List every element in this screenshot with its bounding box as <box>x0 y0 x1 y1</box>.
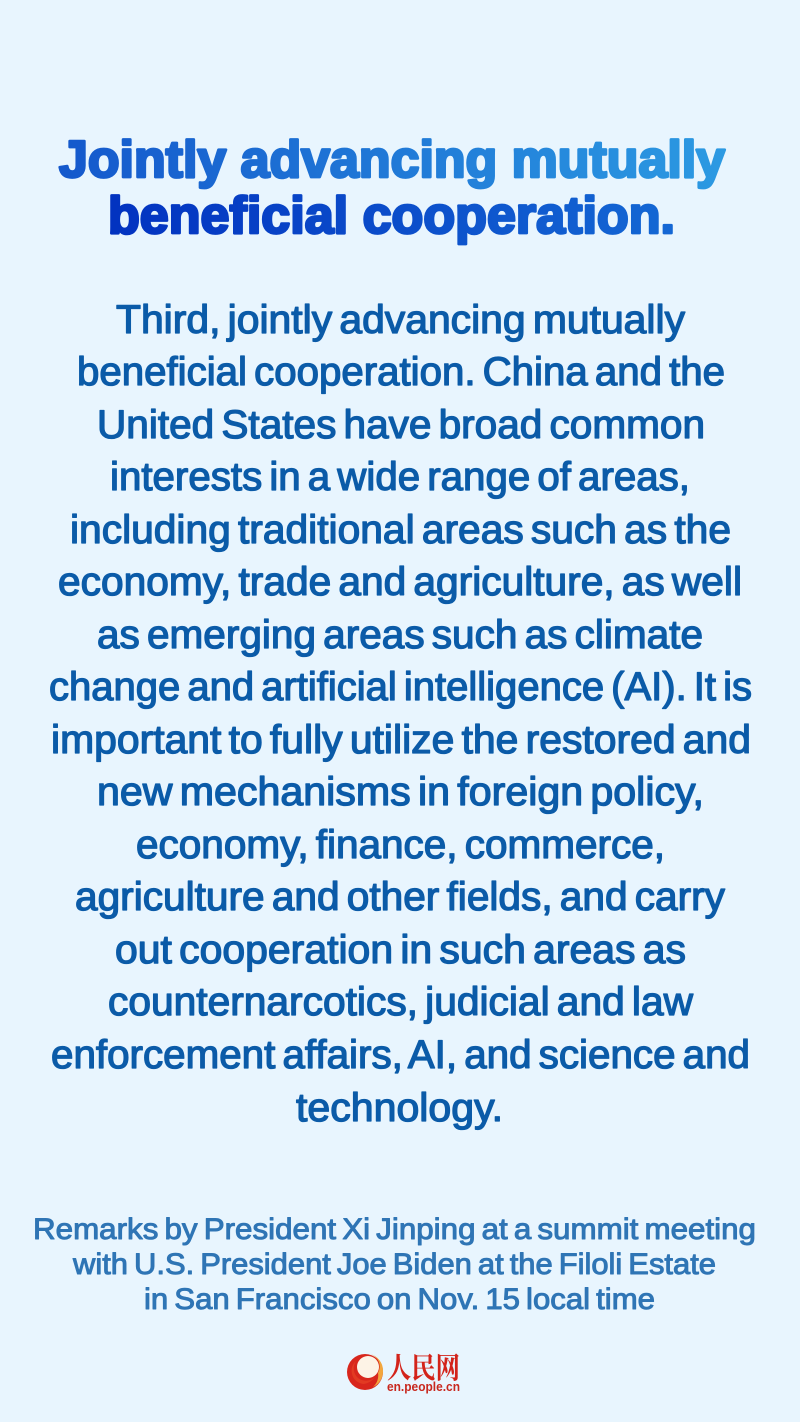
body text: new mechanisms in foreign policy, <box>97 770 704 814</box>
body text <box>49 298 752 1130</box>
body text: agriculture and other fields, and carry <box>75 875 725 919</box>
icon: swirl emblem <box>347 1354 383 1390</box>
body text: beneficial cooperation. China and the <box>77 350 725 394</box>
body text: counternarcotics, judicial and law <box>108 980 693 1024</box>
logo wordmark: 人民网 <box>387 1346 460 1387</box>
body text: enforcement affairs, AI, and science and <box>51 1033 750 1077</box>
body text: including traditional areas such as the <box>70 508 731 552</box>
body text: change and artificial intelligence (AI). It is <box>49 665 752 709</box>
logo url: en.people.cn <box>387 1379 460 1394</box>
body text: United States have broad common <box>97 403 705 447</box>
body text: out cooperation in such areas as <box>115 928 686 972</box>
source note: in San Francisco on Nov. 15 local time <box>144 1283 655 1316</box>
body text: important to fully utilize the restored and <box>51 718 751 762</box>
source note <box>33 1213 756 1316</box>
body text: as emerging areas such as climate <box>97 613 703 657</box>
body text: technology. <box>296 1086 503 1130</box>
title: beneficial cooperation. <box>108 187 675 245</box>
title: Jointly advancing mutually <box>59 131 725 189</box>
logo: People's Daily Online <box>347 1346 460 1394</box>
body text: economy, finance, commerce, <box>136 823 665 867</box>
body text: economy, trade and agriculture, as well <box>58 560 742 604</box>
source note: Remarks by President Xi Jinping at a summit meeting <box>33 1213 756 1246</box>
title <box>59 131 725 245</box>
source note: with U.S. President Joe Biden at the Filoli Estate <box>72 1248 716 1281</box>
body text: Third, jointly advancing mutually <box>116 298 685 342</box>
body text: interests in a wide range of areas, <box>110 455 690 499</box>
